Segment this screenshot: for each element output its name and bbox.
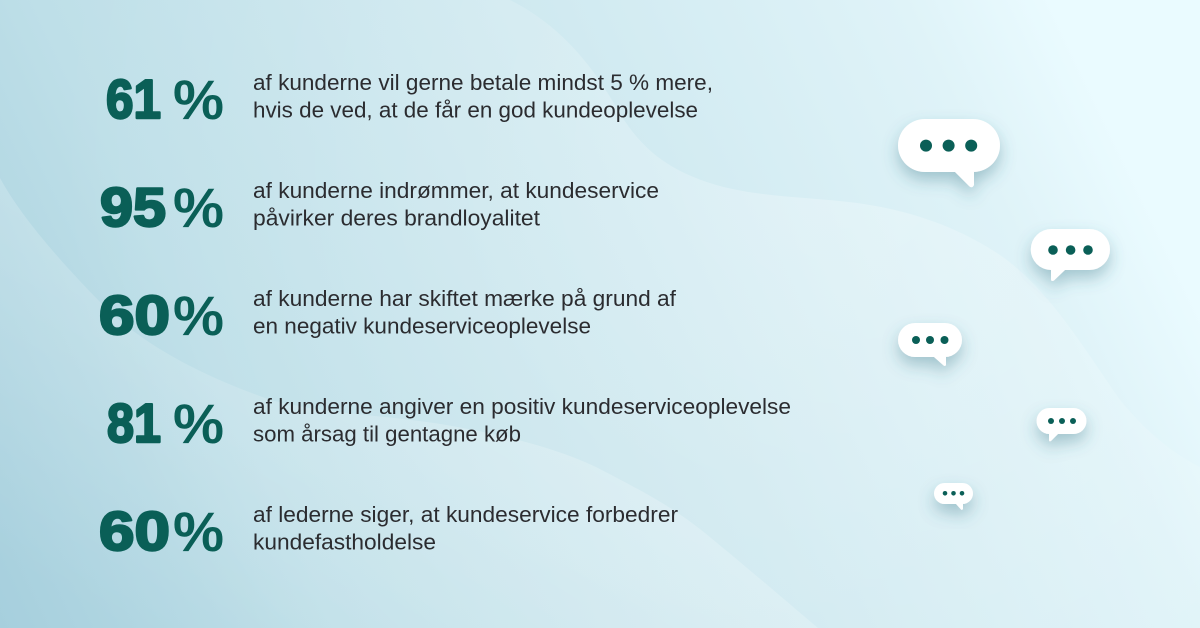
number 60%: 60: [99, 284, 170, 346]
description 61%: af kunderne vil gerne betale mindst 5 % mere,: [253, 70, 713, 95]
icon: speech bubble medium left: [898, 323, 962, 366]
description 60%: en negativ kundeserviceoplevelse: [253, 314, 591, 338]
description 95%: af kunderne indrømmer, at kundeservice: [253, 178, 659, 203]
description 81%: [253, 394, 791, 446]
description 61%: [253, 70, 713, 122]
stat row 4: 81%: [107, 392, 791, 455]
number 81%: [107, 392, 224, 455]
icon: speech bubble small: [1037, 408, 1086, 441]
stat row 1: 61%: [106, 68, 713, 131]
description 61%: hvis de ved, at de får en god kundeoplevelse: [253, 98, 698, 122]
number 61%: [106, 68, 224, 131]
number 61%: %: [173, 68, 224, 131]
number 81%: 81: [107, 392, 161, 454]
icon: speech bubble medium right: [1031, 229, 1110, 281]
stat row 5: 60%: [99, 500, 678, 563]
description 60%: [253, 286, 677, 338]
description 60% leaders: kundefastholdelse: [253, 530, 436, 554]
stat row 2: 95%: [100, 176, 659, 239]
number 60% leaders: 60: [99, 500, 170, 562]
stat row 3: 60%: [99, 284, 677, 347]
number 60% leaders: %: [173, 500, 224, 563]
number 60% leaders: [99, 500, 224, 563]
number 95%: 95: [100, 176, 166, 238]
number 95%: %: [173, 176, 224, 239]
icon: speech bubble large: [898, 119, 1000, 187]
icon: speech bubble smallest: [934, 483, 973, 510]
description 95%: [253, 178, 659, 230]
number 60%: [99, 284, 224, 347]
number 60%: %: [173, 284, 224, 347]
description 60% leaders: [253, 502, 678, 554]
number 61%: 61: [106, 68, 161, 130]
description 81%: af kunderne angiver en positiv kundeserviceoplevelse: [253, 394, 791, 419]
description 60% leaders: af lederne siger, at kundeservice forbedrer: [253, 502, 678, 527]
number 81%: %: [173, 392, 224, 455]
description 95%: påvirker deres brandloyalitet: [253, 206, 540, 230]
background wave: lower light shape: [0, 178, 818, 628]
number 95%: [100, 176, 224, 239]
description 60%: af kunderne har skiftet mærke på grund af: [253, 286, 677, 311]
description 81%: som årsag til gentagne køb: [253, 422, 521, 446]
